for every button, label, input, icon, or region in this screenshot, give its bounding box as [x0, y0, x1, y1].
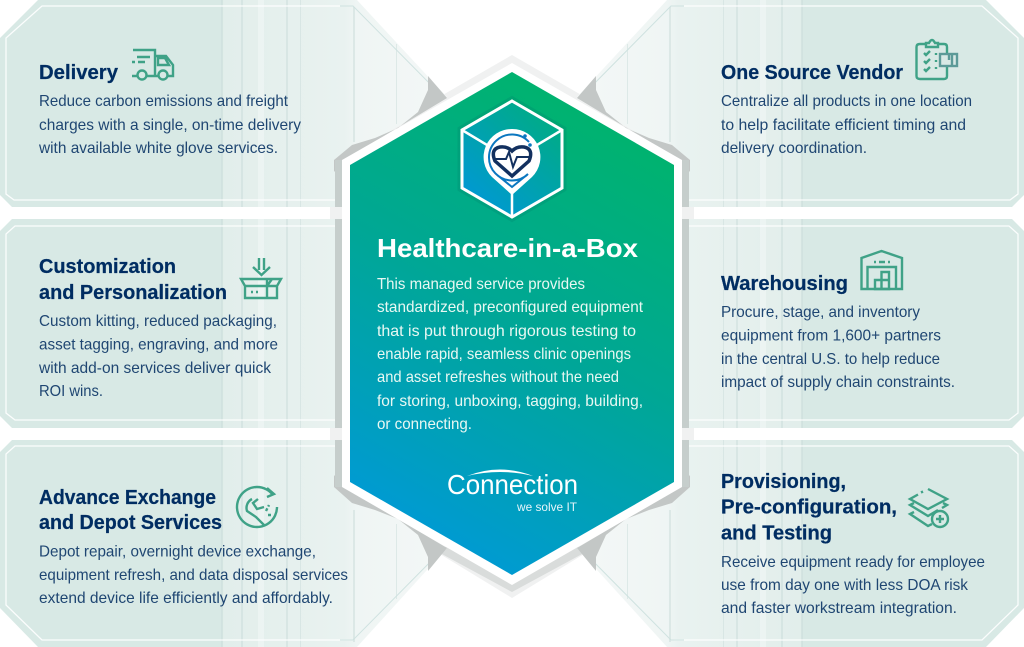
hexagon halo [330, 55, 694, 598]
text: center description: that is put through rigorous testing to [377, 323, 636, 340]
text: customization body: Custom kitting, reduced packaging, [39, 313, 277, 330]
hexagon shadow [334, 76, 690, 571]
heading: provisioning: Provisioning, [721, 470, 846, 493]
icon: warehouse [862, 251, 902, 289]
heading: advance exchange [39, 486, 222, 534]
text: center description: or connecting. [377, 416, 472, 433]
text: provisioning body: Receive equipment ready for employee [721, 554, 985, 571]
logo: connection: we solve IT [516, 500, 578, 514]
heading: delivery: Delivery [39, 61, 119, 84]
panel: delivery [0, 0, 447, 207]
panel: customization and personalization [0, 219, 342, 428]
heading: provisioning [721, 470, 897, 544]
text: advance exchange body: equipment refresh, and data disposal services [39, 567, 348, 584]
text: advance exchange body: extend device life efficiently and affordably. [39, 590, 333, 607]
text: warehousing body: impact of supply chain constraints. [721, 374, 955, 391]
heading: customization: and Personalization [39, 281, 227, 304]
heading: warehousing: Warehousing [721, 272, 848, 295]
center hexagon [342, 63, 682, 585]
text: warehousing body: Procure, stage, and inventory [721, 304, 920, 321]
text: warehousing body [721, 304, 955, 391]
text: delivery body: charges with a single, on-time delivery [39, 117, 301, 134]
text: one source vendor body: delivery coordination. [721, 140, 867, 157]
text: customization body: asset tagging, engraving, and more [39, 336, 278, 354]
text: center description: standardized, preconfigured equipment [377, 299, 644, 316]
heading: one source vendor: One Source Vendor [721, 61, 903, 84]
text: provisioning body: and faster workstream integration. [721, 600, 957, 617]
icon: box with arrow [241, 258, 281, 298]
text: provisioning body: use from day one with less DOA risk [721, 577, 969, 594]
logo: connection: Connection [447, 469, 578, 500]
text: center description: enable rapid, seamless clinic openings [377, 346, 631, 363]
text: one source vendor body: to help facilitate efficient timing and [721, 117, 966, 134]
text: center description: and asset refreshes without the need [377, 369, 619, 386]
heading: customization: Customization [39, 255, 176, 278]
text: one source vendor body: Centralize all products in one location [721, 93, 972, 110]
text: center description: This managed service provides [377, 276, 585, 293]
heading: healthcare-in-a-box: Healthcare-in-a-Box [377, 233, 639, 263]
panel: advance exchange and depot services [0, 440, 447, 647]
text: provisioning body [721, 554, 985, 617]
text: warehousing body: in the central U.S. to help reduce [721, 351, 940, 368]
text: delivery body: with available white glove services. [38, 140, 278, 157]
text: warehousing body: equipment from 1,600+ partners [721, 328, 941, 344]
text: delivery body: Reduce carbon emissions and freight [39, 93, 289, 110]
text: center description [377, 276, 644, 433]
text: customization body: with add-on services deliver quick [38, 360, 272, 377]
heading: advance exchange: and Depot Services [39, 511, 222, 534]
text: delivery body [38, 93, 301, 157]
text: customization body: ROI wins. [39, 383, 103, 400]
text: advance exchange body: Depot repair, overnight device exchange, [39, 544, 316, 560]
icon: delivery truck [132, 50, 173, 80]
panel: one source vendor [577, 0, 1024, 207]
heading: provisioning: Pre-configuration, [721, 496, 897, 518]
icon: healthcare box [462, 101, 562, 217]
icon: repair cycle [237, 487, 277, 527]
icon: stacked layers with plus [910, 489, 948, 527]
logo: connection [447, 469, 578, 514]
text: one source vendor body [721, 93, 972, 157]
text: advance exchange body [39, 544, 348, 607]
heading: advance exchange: Advance Exchange [39, 486, 216, 509]
panel: warehousing [682, 219, 1024, 428]
heading: provisioning: and Testing [721, 522, 832, 544]
heading: customization [39, 255, 227, 304]
icon: clipboard checklist [916, 40, 957, 79]
text: customization body [38, 313, 278, 400]
panel: provisioning, pre-configuration, and testing [577, 440, 1024, 647]
text: center description: for storing, unboxing, tagging, building, [377, 393, 643, 410]
